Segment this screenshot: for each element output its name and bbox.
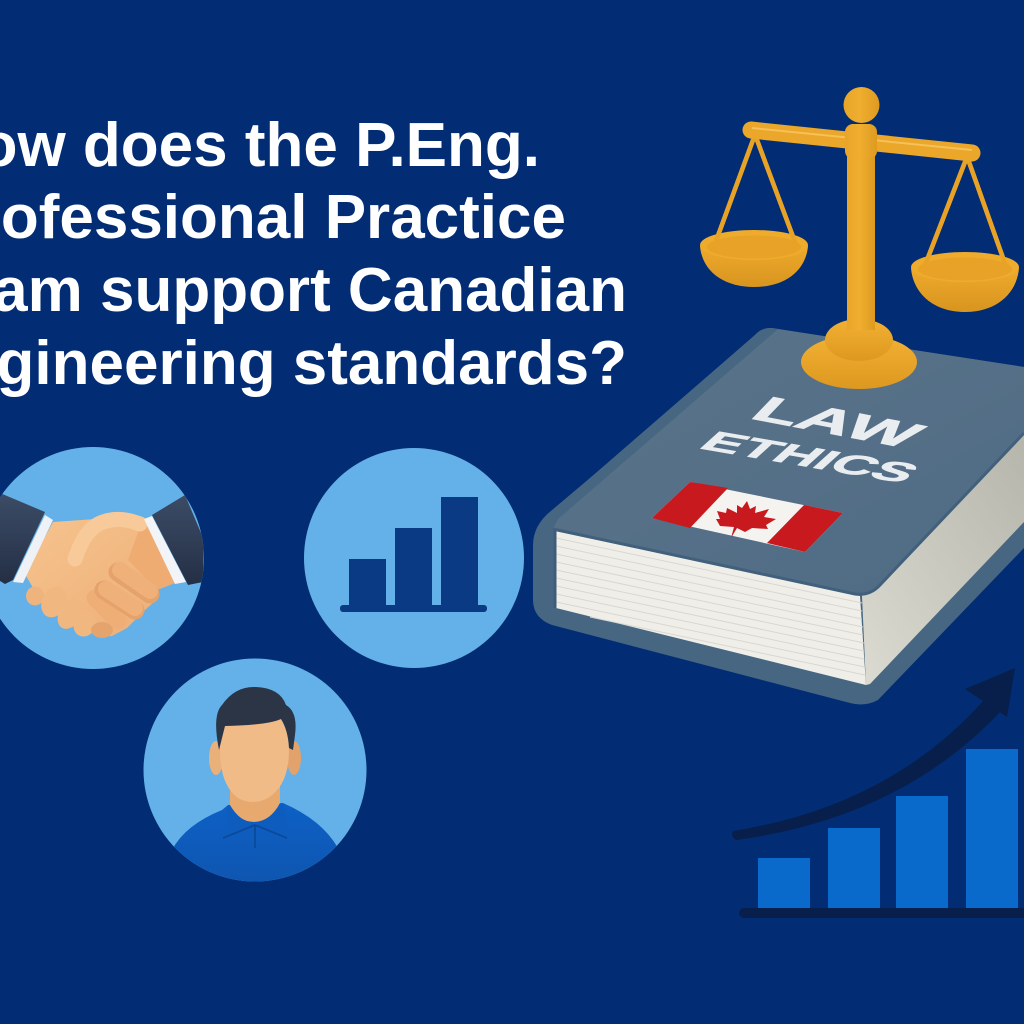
icon: bar chart in circle [304, 448, 524, 668]
title [0, 111, 627, 398]
post [847, 150, 875, 330]
back cover and spine [533, 328, 1024, 704]
page block front [555, 531, 866, 685]
cover title: ETHICS: ETHICS [691, 426, 928, 489]
page block side [862, 432, 1024, 685]
icon: Canadian flag [652, 482, 843, 552]
left pan [700, 140, 808, 287]
icon: handshake in circle [0, 447, 204, 669]
base [801, 335, 917, 389]
collar [845, 124, 877, 159]
finial [844, 87, 880, 123]
icon: balance scale [700, 87, 1019, 389]
beam [751, 130, 972, 153]
cover title: LAW: LAW [741, 390, 934, 455]
arrow [732, 668, 1015, 840]
right pan [911, 162, 1019, 312]
icon: law book [533, 328, 1024, 704]
front cover [540, 328, 1024, 594]
spine band [537, 328, 778, 535]
spine inner edge [554, 531, 556, 608]
growth bar chart [732, 668, 1024, 918]
icon: person in circle [144, 658, 366, 890]
scale strings [712, 140, 1008, 273]
